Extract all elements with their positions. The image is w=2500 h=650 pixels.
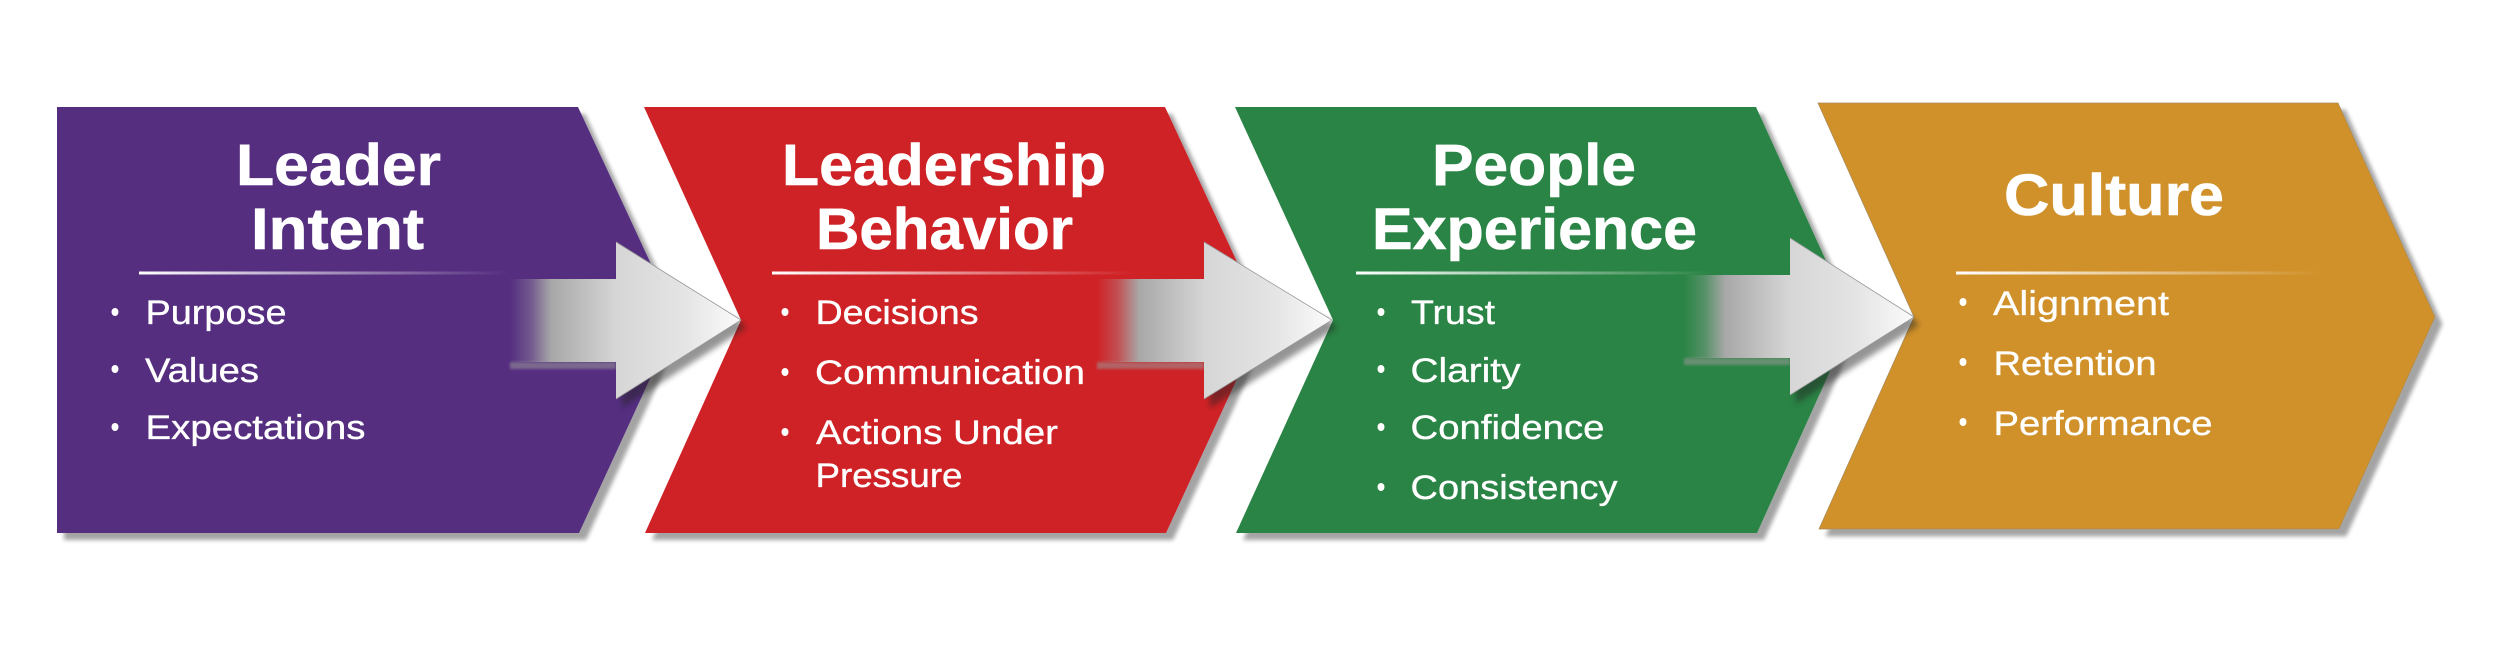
list: Culture items: Retention xyxy=(1994,345,2156,383)
arrow: Leader Intent to Leadership Behavior xyxy=(510,242,746,408)
list: People Experience items: Confidence xyxy=(1410,409,1604,447)
list: People Experience items: Clarity xyxy=(1410,352,1520,390)
list: Leadership Behavior items: Pressure xyxy=(816,457,962,495)
list: People Experience items: Consistency xyxy=(1410,469,1618,507)
divider xyxy=(772,272,1135,274)
list: Culture items: Performance xyxy=(1994,405,2212,443)
divider xyxy=(1956,272,2322,274)
heading: Culture: Culture xyxy=(2004,163,2224,228)
list: Leadership Behavior items: Decisions xyxy=(816,294,978,332)
heading: Leader Intent: Leader xyxy=(236,133,441,198)
list: Leadership Behavior items: Actions Under xyxy=(816,414,1058,452)
list: Leadership Behavior items: Communication xyxy=(815,354,1085,392)
panel: Leadership Behavior xyxy=(644,107,1264,533)
shape: red chevron xyxy=(644,107,1264,533)
divider xyxy=(1356,272,1713,274)
list: Leader Intent items: Expectations xyxy=(146,409,366,447)
panel: Leader Intent xyxy=(57,107,677,533)
list: People Experience items xyxy=(1378,294,1618,507)
shape: green chevron xyxy=(1235,107,1853,533)
heading: Leadership Behavior: Leadership xyxy=(782,133,1106,198)
heading: People Experience xyxy=(1372,133,1697,262)
heading: People Experience: People xyxy=(1432,133,1636,198)
list: Leader Intent items: Values xyxy=(145,352,259,390)
list: Culture items: Alignment xyxy=(1993,285,2170,323)
list: Leader Intent items: Purpose xyxy=(146,294,286,332)
panel: Culture xyxy=(1818,103,2435,529)
heading: People Experience: Experience xyxy=(1372,197,1697,262)
heading: Leader Intent xyxy=(236,133,441,262)
arrow: People Experience to Culture xyxy=(1684,238,1919,404)
heading: Leadership Behavior: Behavior xyxy=(816,197,1073,262)
heading: Leader Intent: Intent xyxy=(251,197,424,262)
list: Leadership Behavior items xyxy=(782,294,1085,495)
panel: People Experience xyxy=(1235,107,1853,533)
shape: gold chevron xyxy=(1818,103,2435,529)
shape: purple pentagon xyxy=(57,107,677,533)
heading: Leadership Behavior xyxy=(782,133,1106,262)
list: Culture items xyxy=(1960,285,2212,443)
list: Leader Intent items xyxy=(112,294,366,447)
arrow: Leadership Behavior to People Experience xyxy=(1097,242,1337,408)
divider xyxy=(139,272,510,274)
list: People Experience items: Trust xyxy=(1411,294,1496,332)
